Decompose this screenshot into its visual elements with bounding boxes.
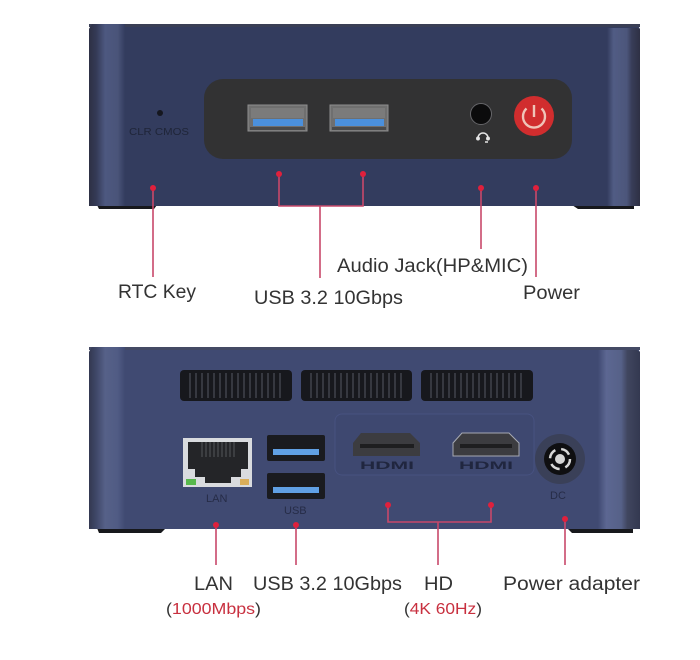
headset icon: [477, 133, 489, 142]
label: Power adapter: Power adapter: [503, 574, 641, 595]
HDMI label 2: HDMI: [459, 460, 513, 472]
USB label: USB: [284, 505, 307, 517]
device body: [89, 24, 640, 206]
DC label: DC: [550, 490, 566, 502]
label: 4K 60Hz: (4K 60Hz ): [404, 601, 482, 618]
HDMI label 1: HDMI: [360, 460, 414, 472]
device feet: [97, 205, 634, 209]
reset pinhole: [157, 110, 163, 116]
label: 1000Mbps: (1000Mbps ): [166, 601, 261, 618]
power button: [514, 96, 554, 136]
DC jack: [535, 434, 585, 484]
LAN label: LAN: [206, 493, 227, 505]
callout dots: front: [150, 171, 539, 191]
panel: front view device: [89, 24, 640, 209]
LAN port: [183, 438, 252, 487]
callout lines: rear: [216, 505, 565, 565]
label: HD: HD: [424, 574, 453, 595]
rear body: [89, 347, 640, 529]
label: USB 3.2 rear: USB 3.2 10Gbps: [253, 574, 402, 595]
vents: [180, 370, 533, 401]
label: Power: Power: [523, 283, 581, 304]
callout dots: rear: [213, 502, 568, 528]
panel: rear view device: [89, 347, 640, 533]
HDMI plate: [335, 414, 534, 475]
label: Audio Jack: Audio Jack(HP&MIC): [337, 256, 528, 277]
CLR CMOS label: CLR CMOS: [129, 126, 189, 138]
label: RTC Key: RTC Key: [118, 282, 196, 303]
label: LAN: LAN: [194, 574, 233, 595]
HDMI port 1: [353, 433, 420, 456]
USB port 2: [330, 105, 388, 131]
front port panel: [204, 79, 572, 159]
rear USB port 1: [267, 435, 325, 461]
label: USB 3.2 front: USB 3.2 10Gbps: [254, 288, 403, 309]
HDMI port 2: [453, 433, 519, 456]
rear USB port 2: [267, 473, 325, 499]
audio jack: [470, 104, 492, 124]
callout lines: front: [153, 174, 536, 278]
rear feet: [97, 528, 633, 533]
USB port 1: [248, 105, 307, 131]
